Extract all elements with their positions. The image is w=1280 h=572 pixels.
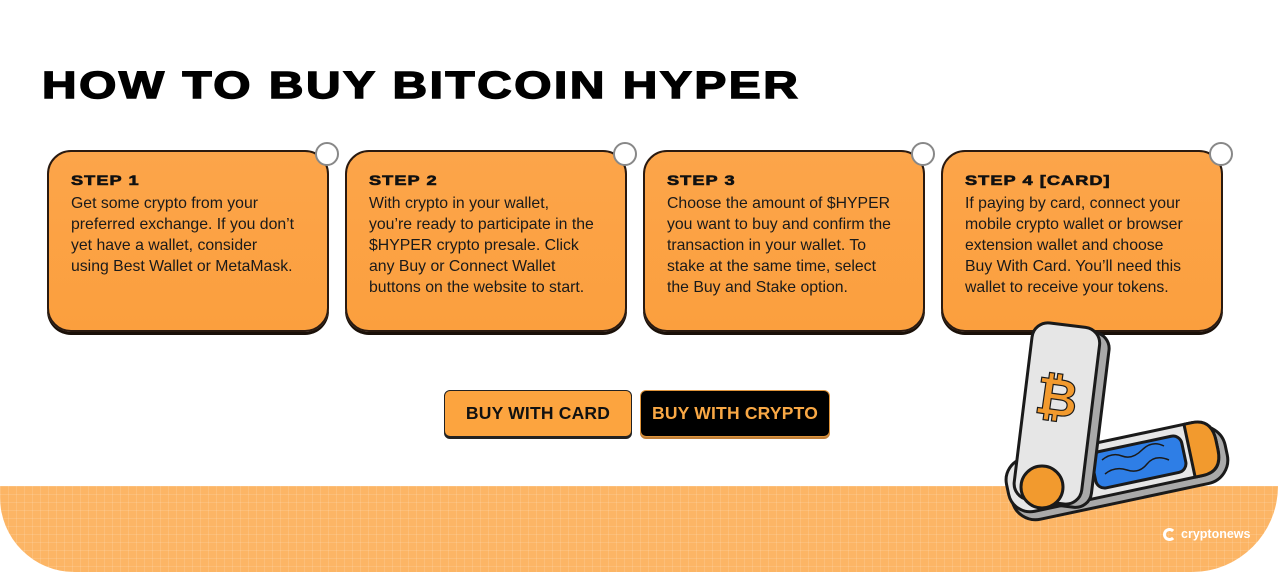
logo: cryptonews: cryptonews <box>1181 527 1250 541</box>
card: step 3: transaction in your wallet. To <box>667 237 866 254</box>
icon: hardware wallet: ₿ <box>1032 367 1082 430</box>
card: step 3 <box>643 150 925 332</box>
card: step 4: extension wallet and choose <box>965 237 1163 254</box>
upper arm <box>1012 321 1111 509</box>
card: step 2: any Buy or Connect Wallet <box>369 258 555 275</box>
card: step 1: Get some crypto from your <box>71 195 258 212</box>
card: step 1 <box>47 150 329 332</box>
button: buy with crypto <box>640 390 830 437</box>
card: step 1: preferred exchange. If you don’t <box>71 216 294 233</box>
button: buy with card: BUY WITH CARD <box>466 403 610 423</box>
card: step 1: using Best Wallet or MetaMask. <box>71 258 293 275</box>
card: step 2: you’re ready to participate in the <box>369 216 594 233</box>
card: step 2: With crypto in your wallet, <box>369 195 549 212</box>
card: step 3: STEP 3 <box>667 172 736 188</box>
button: buy with card <box>444 390 632 437</box>
card: step 3: the Buy and Stake option. <box>667 279 848 296</box>
bottom band <box>0 486 1278 572</box>
title: HOW TO BUY BITCOIN HYPER <box>42 65 800 107</box>
card: step 2: $HYPER crypto presale. Click <box>369 237 579 254</box>
card: step 4: STEP 4 [CARD] <box>965 172 1111 188</box>
card: step 4: Buy With Card. You’ll need this <box>965 258 1181 275</box>
card: step 3: stake at the same time, select <box>667 258 876 275</box>
card: step 3: you want to buy and confirm the <box>667 216 891 233</box>
card: step 4: If paying by card, connect your <box>965 195 1180 212</box>
card: step 1: STEP 1 <box>71 172 140 188</box>
card: step 1: yet have a wallet, consider <box>71 237 257 254</box>
card: step 3: Choose the amount of $HYPER <box>667 195 890 212</box>
card: step 4: mobile crypto wallet or browser <box>965 216 1183 233</box>
card: step 4: wallet to receive your tokens. <box>965 279 1169 296</box>
card: step 4 <box>941 150 1223 332</box>
button: buy with crypto: BUY WITH CRYPTO <box>652 403 818 423</box>
icon: hardware wallet <box>1004 321 1230 522</box>
card: step 2: buttons on the website to start. <box>369 279 584 296</box>
card: step 2: STEP 2 <box>369 172 438 188</box>
lower body <box>1002 417 1232 525</box>
card: step 2 <box>345 150 627 332</box>
